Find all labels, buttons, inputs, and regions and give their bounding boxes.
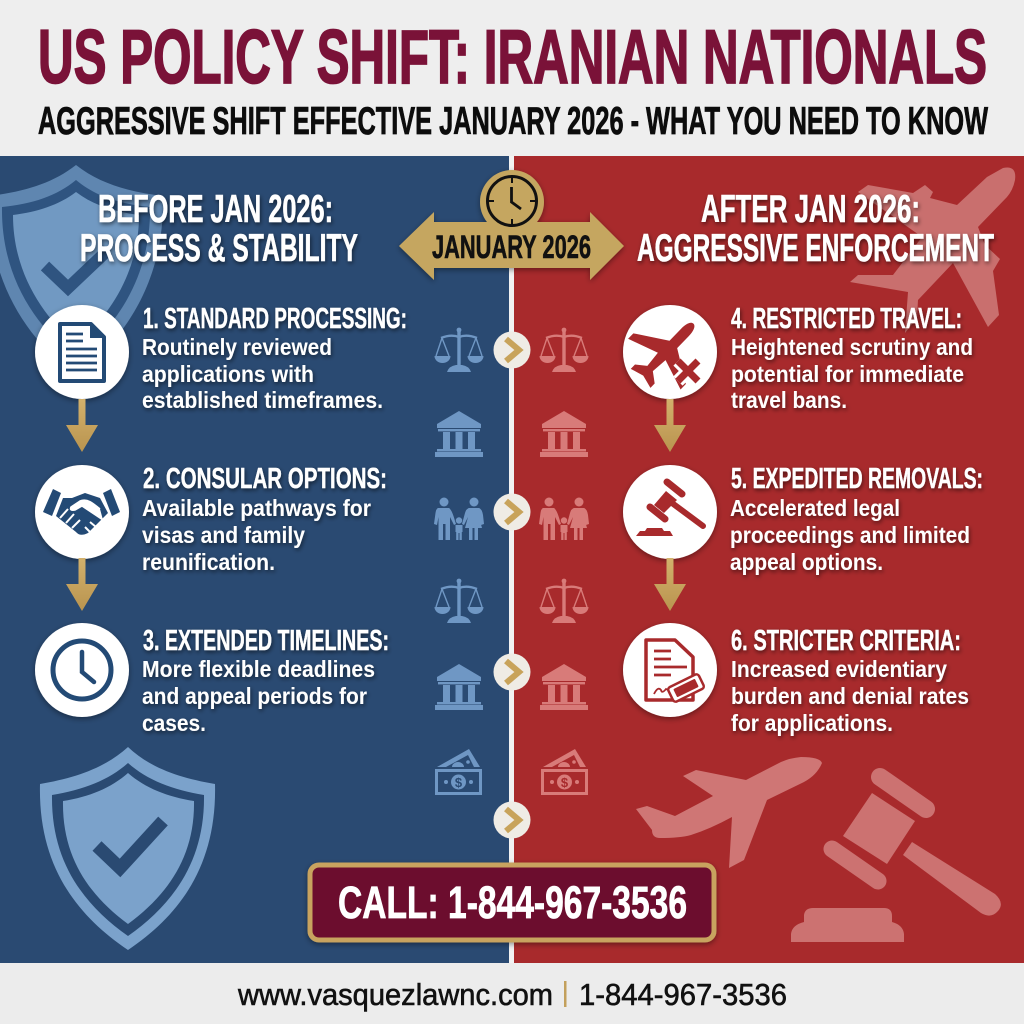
step text: established timeframes. — [142, 387, 383, 413]
panel heading: before: BEFORE JAN 2026: — [98, 188, 333, 231]
icon: scales — [434, 328, 484, 372]
step text — [142, 625, 389, 736]
arrow: step 1 to 2 — [66, 399, 98, 452]
watermark: plane top right — [850, 168, 1015, 333]
icon: bank — [540, 411, 588, 457]
chevron: row 4 — [494, 802, 530, 838]
icon: money — [435, 749, 482, 795]
step text: Increased evidentiary — [731, 656, 947, 682]
step 2: consular options — [35, 463, 387, 575]
step text: appeal options. — [730, 549, 883, 575]
step text: Heightened scrutiny and — [731, 334, 973, 360]
icon: clock — [35, 623, 129, 717]
icon: family — [434, 498, 484, 540]
step 4: restricted travel — [614, 298, 973, 413]
center divider — [509, 156, 514, 963]
step 1: standard processing — [35, 303, 407, 413]
icon: money — [541, 749, 588, 795]
step text: proceedings and limited — [730, 522, 970, 548]
panel heading: before: PROCESS & STABILITY — [80, 227, 358, 270]
timeline: date banner — [399, 170, 624, 280]
icon: money: $ — [561, 775, 569, 790]
icon: scales 2 — [434, 579, 484, 623]
step text: Available pathways for — [142, 495, 371, 521]
banner shape — [399, 170, 624, 280]
step text: and appeal periods for — [142, 683, 367, 709]
step text: for applications. — [731, 710, 893, 736]
step text: More flexible deadlines — [142, 656, 375, 682]
icon: money: $ — [455, 775, 463, 790]
step text: applications with — [142, 361, 314, 387]
center icons: left column — [434, 328, 484, 795]
step text — [730, 463, 983, 575]
panel heading: after — [637, 188, 994, 270]
footer band — [0, 963, 1024, 1024]
step text — [142, 463, 387, 575]
center icons: right column — [539, 328, 589, 795]
step text — [731, 625, 969, 736]
step text: potential for immediate — [731, 361, 964, 387]
clock face — [488, 176, 536, 226]
arrow: step 5 to 6 — [654, 558, 686, 611]
icon: scales — [540, 328, 588, 372]
step text: Routinely reviewed — [142, 334, 332, 360]
icon: document — [35, 305, 129, 399]
icon: plane with x — [614, 298, 720, 404]
watermark: plane bottom right — [636, 757, 822, 868]
step text: visas and family — [142, 522, 305, 548]
icon: bank 2 — [540, 664, 588, 710]
step text: 1. STANDARD PROCESSING: — [143, 303, 407, 335]
watermark: shield bottom left — [40, 747, 215, 950]
arrow: step 4 to 5 — [654, 399, 686, 452]
step text: cases. — [142, 710, 206, 736]
arrow: step 2 to 3 — [66, 558, 98, 611]
chevron: row 1 — [494, 332, 530, 368]
icon: bank — [435, 411, 483, 457]
step text: reunification. — [142, 549, 275, 575]
icon: gavel — [623, 465, 717, 559]
step 3: extended timelines — [35, 623, 389, 736]
icon: scales 2 — [540, 579, 588, 623]
watermark: gavel bottom right — [791, 777, 1001, 942]
icon: bank 2 — [435, 664, 483, 710]
panel: after background — [514, 156, 1024, 963]
step text: travel bans. — [731, 387, 847, 413]
date label: JANUARY 2026 — [432, 229, 591, 265]
step 5: expedited removals — [623, 463, 983, 575]
chevron: row 3 — [494, 654, 530, 690]
step text: burden and denial rates — [731, 683, 969, 709]
step text: Accelerated legal — [730, 495, 900, 521]
footer contact line — [237, 977, 787, 1012]
panel heading: after: AFTER JAN 2026: — [701, 188, 920, 231]
icon: family — [539, 498, 589, 540]
step text: 3. EXTENDED TIMELINES: — [143, 625, 389, 657]
chevron: row 2 — [494, 494, 530, 530]
step text — [731, 303, 973, 413]
call to action button — [310, 865, 714, 940]
step text — [142, 303, 407, 413]
icon: signed document — [623, 623, 717, 717]
footer contact line: www.vasquezlawnc.com — [237, 977, 553, 1012]
step text: 2. CONSULAR OPTIONS: — [143, 463, 387, 495]
watermark: shield top left — [0, 165, 163, 375]
footer contact line: 1-844-967-3536 — [579, 977, 787, 1012]
panel heading: before — [80, 188, 358, 270]
icon: handshake — [35, 465, 129, 559]
phone number label: CALL: 1-844-967-3536 — [338, 877, 687, 928]
panel: before background — [0, 156, 509, 963]
step 6: stricter criteria — [623, 623, 969, 736]
